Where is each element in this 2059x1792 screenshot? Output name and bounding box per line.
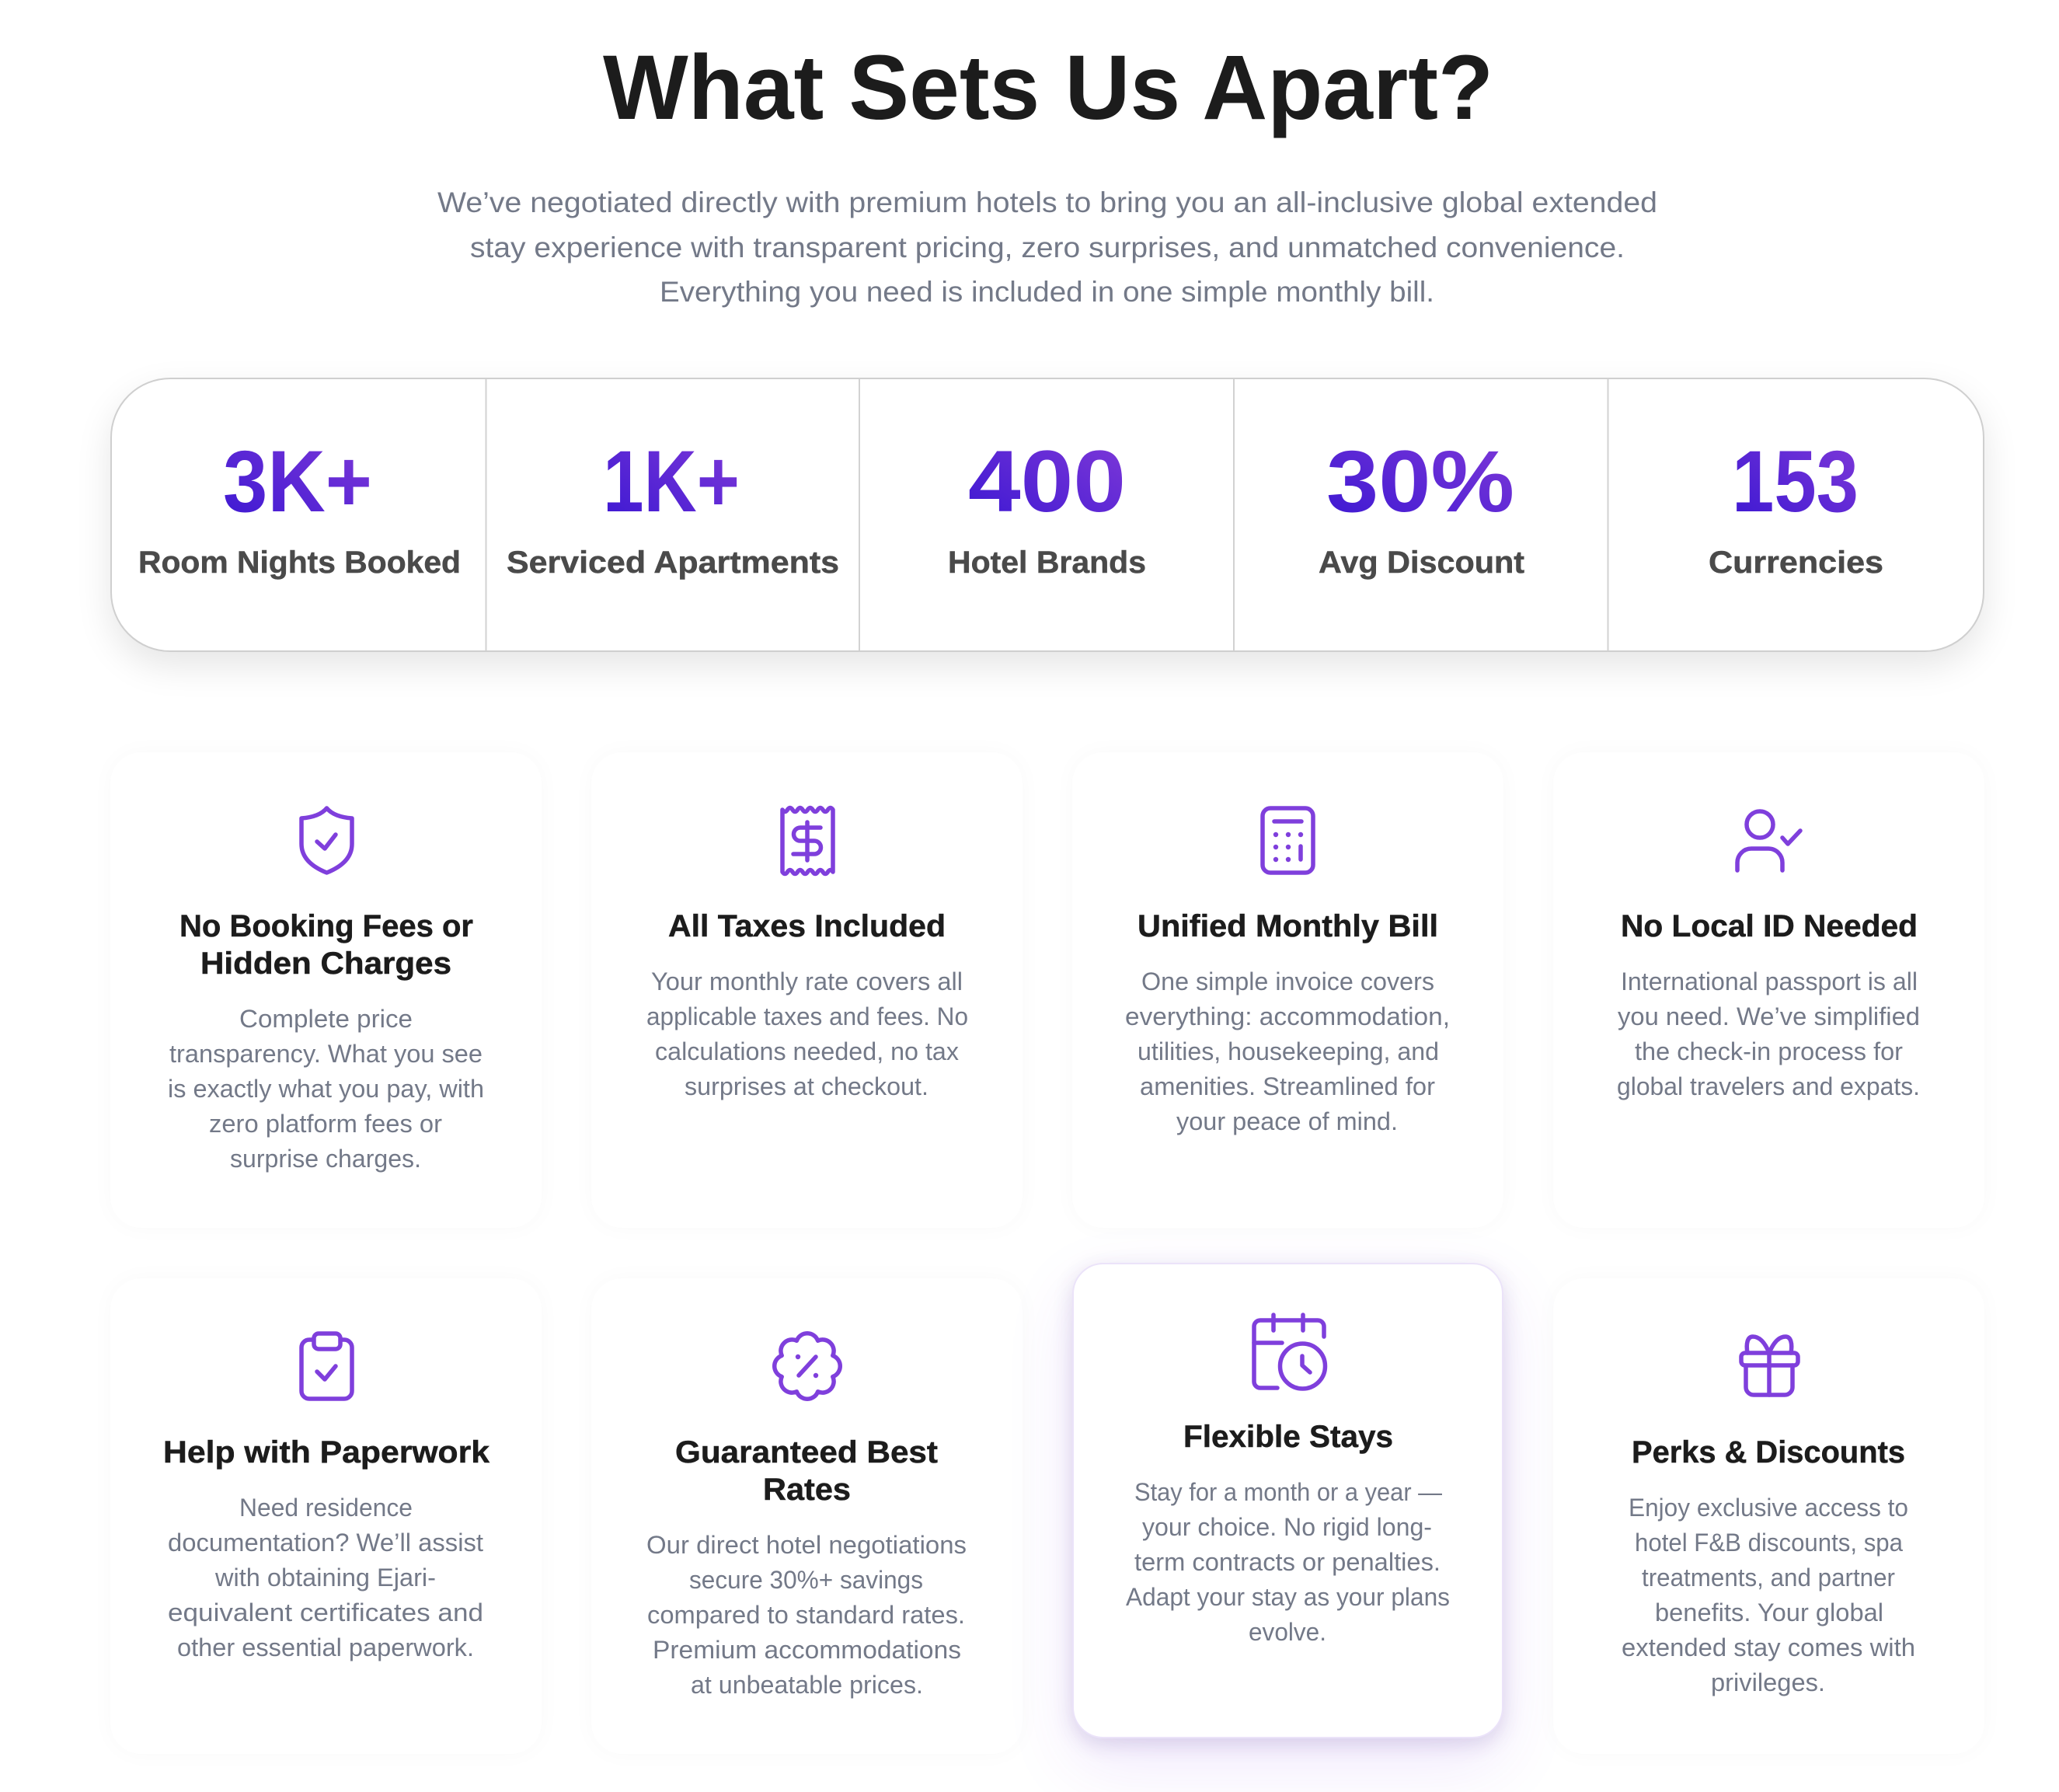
description: your choice. No rigid long- <box>1142 1513 1432 1541</box>
description <box>1622 1494 1915 1696</box>
description: Adapt your stay as your plans <box>1126 1583 1450 1611</box>
heading: Unified Monthly Bill <box>1138 909 1438 943</box>
description <box>168 1494 483 1661</box>
description: privileges. <box>1711 1668 1825 1696</box>
description: compared to standard rates. <box>647 1601 965 1629</box>
stat: hotel brands <box>948 433 1146 580</box>
description: amenities. Streamlined for <box>1140 1072 1435 1100</box>
panel: guaranteed best rates <box>591 1278 1023 1754</box>
description: Enjoy exclusive access to <box>1629 1494 1908 1522</box>
heading: Perks & Discounts <box>1632 1435 1905 1470</box>
heading: Help with Paperwork <box>163 1435 490 1470</box>
stat: room nights booked <box>138 433 461 580</box>
stat: average discount: 30% <box>1326 433 1514 530</box>
panel: statistics bar <box>110 378 1984 652</box>
icon: clipboard check <box>301 1334 352 1399</box>
description: at unbeatable prices. <box>691 1671 923 1699</box>
stat: hotel brands: 400 <box>968 433 1126 530</box>
stat: serviced apartments: Serviced Apartments <box>507 546 839 580</box>
heading: Hidden Charges <box>200 947 451 981</box>
stat: room nights booked: 3K+ <box>223 433 372 530</box>
description: Our direct hotel negotiations <box>646 1531 967 1559</box>
description: documentation? We’ll assist <box>168 1529 483 1557</box>
description: with obtaining Ejari- <box>214 1564 436 1592</box>
description: applicable taxes and fees. No <box>646 1002 968 1030</box>
icon: gift box <box>1741 1337 1798 1395</box>
description: transparency. What you see <box>169 1040 483 1068</box>
description: is exactly what you pay, with <box>168 1075 484 1103</box>
description: utilities, housekeeping, and <box>1138 1037 1439 1065</box>
heading: Rates <box>763 1473 851 1507</box>
heading: Guaranteed Best <box>675 1435 938 1470</box>
stat: hotel brands: Hotel Brands <box>948 546 1146 580</box>
icon: calculator <box>1263 808 1313 873</box>
description: surprises at checkout. <box>685 1072 928 1100</box>
description: your peace of mind. <box>1176 1107 1398 1135</box>
description: global travelers and expats. <box>1617 1072 1920 1100</box>
description: calculations needed, no tax <box>655 1037 959 1065</box>
intro paragraph: We’ve negotiated directly with premium hotels to bring you an all-inclusive global extended <box>437 187 1657 218</box>
description: treatments, and partner <box>1642 1564 1895 1592</box>
description: extended stay comes with <box>1622 1633 1915 1661</box>
stat: serviced apartments <box>507 433 839 580</box>
description: term contracts or penalties. <box>1134 1548 1441 1576</box>
description: Stay for a month or a year — <box>1134 1478 1442 1506</box>
description: secure 30%+ savings <box>689 1566 923 1594</box>
description: International passport is all <box>1621 967 1918 995</box>
stat: currencies: Currencies <box>1709 546 1883 580</box>
description: equivalent certificates and <box>168 1599 483 1626</box>
panel: unified monthly bill <box>1072 752 1503 1228</box>
description: Complete price <box>239 1005 413 1033</box>
description: Premium accommodations <box>653 1636 961 1664</box>
icon: receipt dollar <box>782 808 833 873</box>
intro paragraph: Everything you need is included in one simple monthly bill. <box>660 276 1434 308</box>
description <box>1617 967 1920 1100</box>
description: the check-in process for <box>1635 1037 1903 1065</box>
description: hotel F&B discounts, spa <box>1635 1529 1903 1557</box>
description <box>1125 967 1450 1135</box>
panel: no local id needed <box>1553 752 1984 1228</box>
stat: currencies <box>1709 433 1883 580</box>
icon: user check <box>1737 811 1800 870</box>
description <box>168 1005 484 1173</box>
panel: no booking fees <box>110 752 542 1228</box>
title: What Sets Us Apart? <box>603 37 1493 139</box>
panel: flexible stays (highlighted) <box>1072 1263 1503 1738</box>
icon: discount badge <box>775 1334 840 1399</box>
intro paragraph <box>437 187 1657 308</box>
stat: average discount <box>1319 433 1524 580</box>
heading <box>179 909 473 981</box>
panel: perks and discounts <box>1553 1278 1984 1754</box>
heading: Flexible Stays <box>1183 1420 1393 1454</box>
description <box>646 1531 967 1699</box>
description: benefits. Your global <box>1655 1599 1883 1626</box>
stat: room nights booked: Room Nights Booked <box>138 546 461 580</box>
panel: help with paperwork <box>110 1278 542 1754</box>
icon: shield check <box>301 808 352 873</box>
panel: all taxes included <box>591 752 1023 1228</box>
description: everything: accommodation, <box>1125 1002 1450 1030</box>
description <box>1126 1478 1450 1646</box>
stat: currencies: 153 <box>1732 433 1859 530</box>
heading: No Booking Fees or <box>179 909 473 943</box>
heading: All Taxes Included <box>668 909 946 943</box>
heading <box>675 1435 938 1507</box>
intro paragraph: stay experience with transparent pricing, zero surprises, and unmatched convenience. <box>470 232 1625 263</box>
description: other essential paperwork. <box>177 1633 474 1661</box>
description: you need. We’ve simplified <box>1618 1002 1920 1030</box>
stat: average discount: Avg Discount <box>1319 546 1524 580</box>
icon: calendar clock <box>1254 1315 1326 1389</box>
description <box>646 967 968 1100</box>
description: surprise charges. <box>230 1145 421 1173</box>
description: One simple invoice covers <box>1141 967 1434 995</box>
stat: serviced apartments: 1K+ <box>603 433 740 530</box>
heading: No Local ID Needed <box>1621 909 1918 943</box>
description: zero platform fees or <box>209 1110 442 1138</box>
description: Your monthly rate covers all <box>651 967 963 995</box>
description: evolve. <box>1249 1618 1326 1646</box>
description: Need residence <box>239 1494 413 1522</box>
